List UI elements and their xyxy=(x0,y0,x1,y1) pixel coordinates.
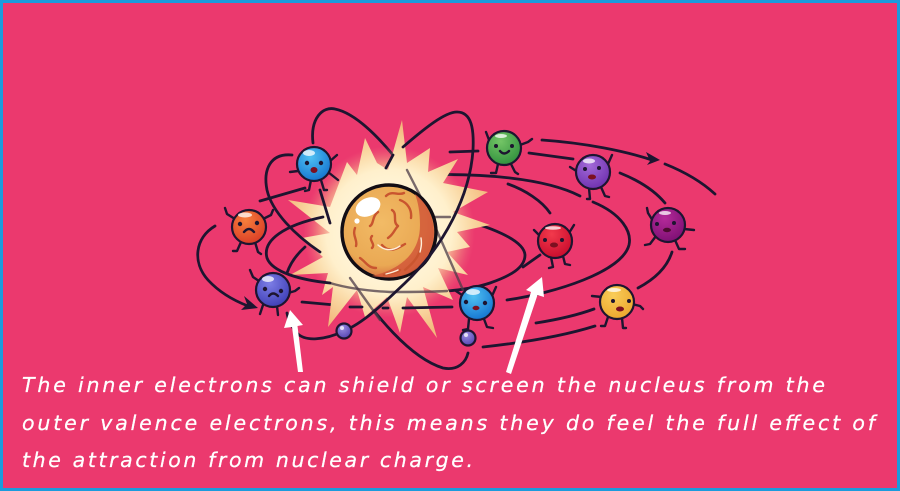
electron: blue, lower middle xyxy=(456,286,496,330)
caption text: the attraction from nuclear charge. xyxy=(22,448,473,472)
nucleus xyxy=(342,185,436,279)
orbit paths in front of the burst xyxy=(266,112,473,339)
orbit lines passing over the burst xyxy=(330,155,463,320)
caption text: outer valence electrons, this means they do feel the full effect of xyxy=(22,411,878,435)
electron: red xyxy=(534,224,574,268)
electron: magenta xyxy=(645,208,694,249)
caption text xyxy=(22,373,878,472)
electron: blue, top left xyxy=(290,147,338,191)
caption text: The inner electrons can shield or screen the nucleus from the xyxy=(22,373,825,397)
white arrow: pointing to outer electron xyxy=(506,277,544,374)
orbit paths behind the burst xyxy=(198,109,715,369)
arrowhead: outer orbit xyxy=(646,152,660,165)
electron: green xyxy=(486,131,532,174)
arrowhead: left orbit xyxy=(241,296,258,310)
electron: purple xyxy=(570,155,612,199)
white arrow: pointing to inner electron xyxy=(284,310,303,372)
electron: indigo, lower left xyxy=(250,270,299,315)
electron: orange, left xyxy=(225,208,273,254)
small purple particle left xyxy=(336,324,352,338)
electron: yellow xyxy=(592,285,643,328)
starburst glow behind nucleus xyxy=(288,120,490,338)
small purple particle right xyxy=(460,330,476,346)
